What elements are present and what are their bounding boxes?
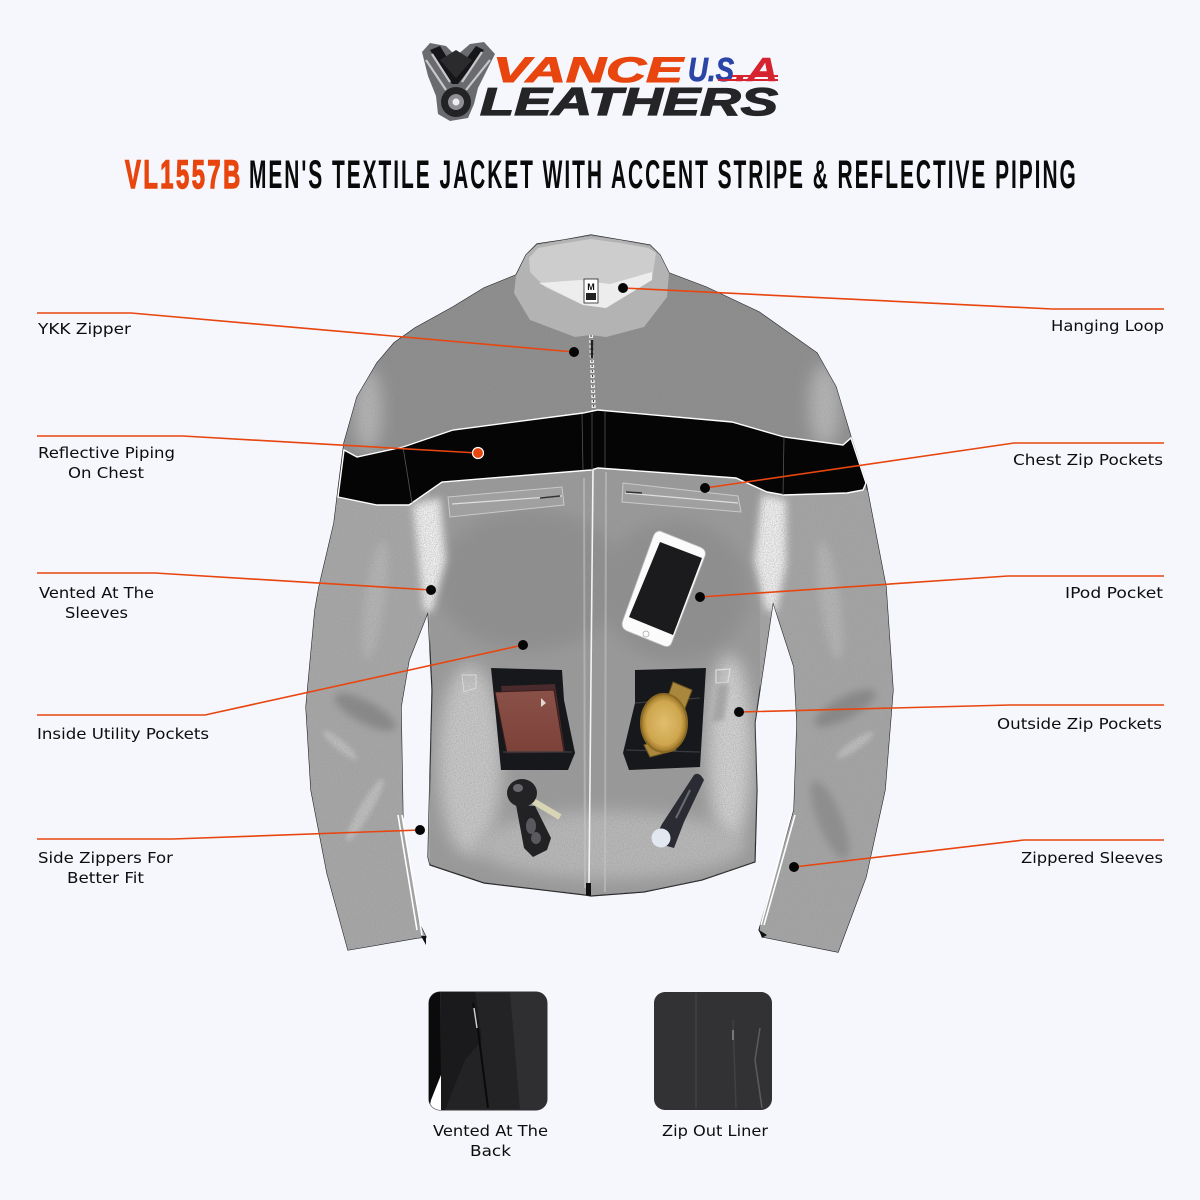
size tag [584,279,598,303]
callout: Reflective Piping On Chest: Reflective Piping [38,444,175,462]
jacket body [300,230,900,960]
callout: Side Zippers For Better Fit [37,825,425,887]
car key [507,779,560,857]
callout: Vented At The Sleeves [37,573,436,622]
callout: IPod Pocket [695,576,1164,602]
sleeve zippers [398,815,795,945]
left inside pocket [491,668,575,770]
right chest zip pocket [622,483,741,512]
callout: Reflective Piping On Chest [37,436,484,482]
left chest zip pocket [448,487,564,517]
callout: Side Zippers For Better Fit: Better Fit [67,869,144,887]
collar inside back [529,239,656,308]
back vent photo [429,992,547,1110]
detail panel: Vented At The Back: Back [470,1142,511,1160]
neck opening [539,272,652,308]
collar stand [514,236,669,337]
icon: v-twin engine [422,42,495,121]
wallet [495,684,565,753]
right inside pocket [623,668,706,770]
jacket illustration [300,230,900,960]
flashlight [652,774,704,848]
center placket [589,470,593,884]
black accent stripe [338,410,866,505]
title text: MEN'S TEXTILE JACKET WITH ACCENT STRIPE & REFLECTIVE PIPING [249,152,1076,197]
callout: Outside Zip Pockets: Outside Zip Pockets [997,715,1162,733]
logo word: VANCE: VANCE [493,51,686,90]
title code: VL1557B [125,153,240,196]
callout: Zippered Sleeves [789,840,1164,872]
hem zipper end [586,883,591,896]
stripe stitching [403,411,784,503]
callout: Reflective Piping On Chest: On Chest [68,464,144,482]
callout: Inside Utility Pockets: Inside Utility Pockets [37,725,209,743]
callout: Zippered Sleeves: Zippered Sleeves [1021,849,1163,867]
title [125,152,1076,197]
pocket flap folds [503,698,700,752]
callout: YKK Zipper [37,313,579,357]
detail panel: Vented At The Back [429,992,548,1160]
size tag: M [587,282,595,292]
liner photo [654,992,772,1110]
logo word: U.S.A: .A [735,51,778,88]
callout: Outside Zip Pockets [734,705,1164,733]
callout: YKK Zipper: YKK Zipper [37,320,132,338]
phone [622,531,705,646]
collar [514,236,669,337]
callout: Vented At The Sleeves: Vented At The [39,584,154,602]
callout: Chest Zip Pockets [700,443,1164,493]
callout: Hanging Loop: Hanging Loop [1051,317,1164,335]
callout: Chest Zip Pockets: Chest Zip Pockets [1013,451,1163,469]
detail panel: Zip Out Liner: Zip Out Liner [662,1122,769,1140]
logo word: U.S.A: U.S [688,51,734,88]
logo word: U.S.A [688,51,778,88]
detail panel: Zip Out Liner [654,992,772,1140]
front zipper [591,335,594,415]
detail panel: Vented At The Back: Vented At The [433,1122,548,1140]
callout: Side Zippers For Better Fit: Side Zippers For [38,849,174,867]
callout: IPod Pocket: IPod Pocket [1065,584,1163,602]
logo: Vance Leathers USA [422,42,778,124]
outside zip pockets [462,669,730,722]
callout: Vented At The Sleeves: Sleeves [65,604,128,622]
callout: Inside Utility Pockets [37,640,528,743]
gold watch [641,682,692,757]
callout: Hanging Loop [618,283,1164,335]
placket seams [584,472,606,892]
logo word: LEATHERS: LEATHERS [480,81,778,124]
